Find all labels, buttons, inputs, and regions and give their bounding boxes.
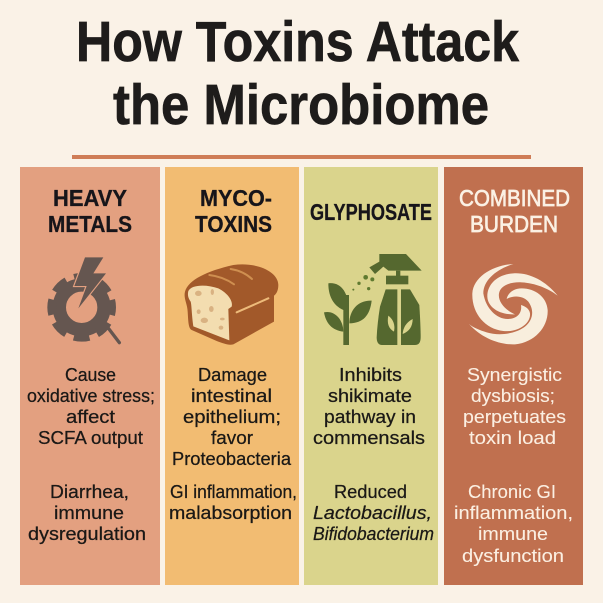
heading: combined burden: COMBINED [459,185,570,211]
text: effects: dysfunction [462,545,564,566]
text: mechanism: commensals [313,427,425,448]
heading: mycotoxins [195,185,272,237]
icon: gear with lightning bolt [52,257,119,343]
heading: heavy metals: HEAVY [53,185,127,211]
text: mechanism [463,364,566,448]
text: mechanism: epithelium; [183,406,281,427]
heading: heavy metals: METALS [48,211,132,237]
text: mechanism: favor [211,427,253,448]
panel: mycotoxins [165,167,299,585]
icon: bread loaf [185,264,278,345]
heading: mycotoxins: MYCO- [200,185,272,211]
text: effects [454,481,573,566]
heading: combined burden: BURDEN [470,211,558,237]
text: effects: Chronic GI [468,481,556,502]
text: mechanism: Cause [65,364,116,385]
text: effects [313,481,434,544]
text: mechanism: SCFA output [38,427,143,448]
icon: plant and spray bottle [324,254,422,345]
panel: heavy metals [20,167,160,585]
icon: swirl [469,264,558,344]
panel: glyphosate [304,167,438,585]
heading: glyphosate: GLYPHOSATE [310,199,432,225]
title: How Toxins Attack [76,10,519,74]
text: mechanism: oxidative stress; [27,385,155,406]
text: mechanism: perpetuates [463,406,566,427]
text: mechanism: affect [66,406,115,427]
text: effects: immune [478,523,548,544]
heading: combined burden [459,185,570,237]
text: mechanism: Synergistic [467,364,562,385]
text: mechanism: Proteobacteria [172,448,292,469]
panel: combined burden [444,167,583,585]
heading: mycotoxins: TOXINS [195,211,272,237]
text: mechanism [27,364,155,448]
text: mechanism: pathway in [324,406,416,427]
text: effects: dysregulation [28,523,146,544]
title [76,10,519,137]
text: mechanism: Damage [198,364,267,385]
text: mechanism [313,364,425,448]
heading: heavy metals [48,185,132,237]
text: effects [28,481,146,544]
text: mechanism: shikimate [328,385,412,406]
text: effects: malabsorption [169,502,292,523]
text: mechanism: dysbiosis; [471,385,555,406]
text: effects: Reduced [334,481,407,502]
text: mechanism: Inhibits [339,364,402,385]
title: the Microbiome [113,73,489,137]
text: effects: inflammation, [454,502,573,523]
text: effects: Diarrhea, [50,481,129,502]
text: effects: GI inflammation, [170,481,297,502]
text: effects: immune [54,502,124,523]
text: effects: Bifidobacterium [313,523,434,544]
text: mechanism: toxin load [469,427,556,448]
text: mechanism: intestinal [191,385,272,406]
text: effects [169,481,297,523]
text: effects: Lactobacillus, [313,502,432,523]
text: mechanism [172,364,292,469]
